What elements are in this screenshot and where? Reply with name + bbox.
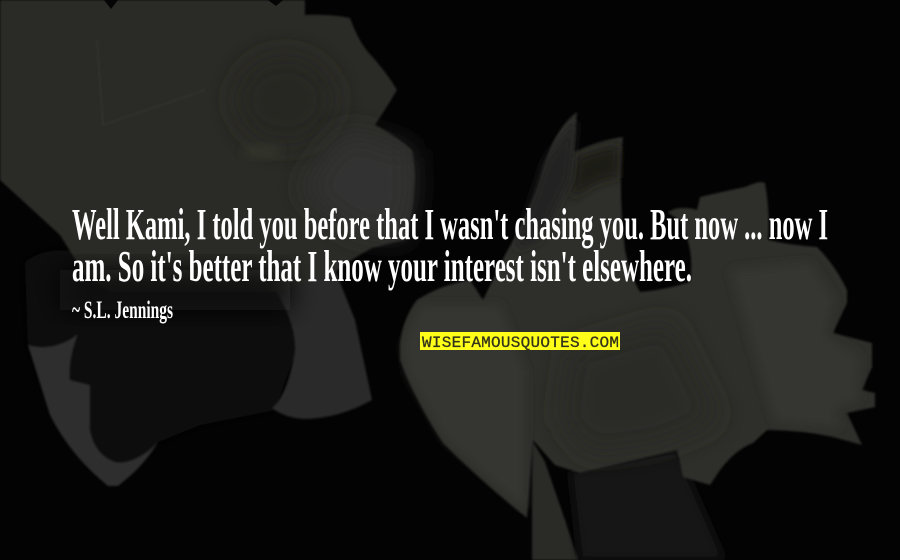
petal: lower-left highlight bbox=[28, 334, 158, 486]
petal: bottom fold bbox=[532, 440, 578, 560]
flower body silhouette bbox=[0, 0, 415, 292]
attribution: ~ S.L. Jennings bbox=[72, 297, 173, 324]
petal: lower-left shadow bbox=[25, 250, 300, 487]
right flower bbox=[400, 112, 875, 560]
highlight: trumpet rim bbox=[300, 130, 414, 240]
shade: bottom fade bbox=[60, 270, 290, 310]
shade: trumpet centre bbox=[235, 55, 335, 145]
notch marks at top edge bbox=[104, 0, 283, 9]
shade: back petal inner bbox=[572, 146, 620, 200]
watermark badge: WISEFAMOUSQUOTES.COM bbox=[422, 334, 619, 352]
crease lines bbox=[97, 40, 205, 125]
shadow: lower dark area bbox=[570, 450, 725, 560]
petal: lower-middle highlight bbox=[270, 270, 372, 419]
highlight: stamen tint bbox=[242, 145, 282, 159]
highlight: trumpet bbox=[730, 262, 860, 428]
shade: tall petal bbox=[515, 118, 577, 250]
quote text bbox=[72, 200, 828, 291]
flower body silhouette bbox=[400, 112, 875, 518]
highlight: body left bbox=[403, 305, 525, 510]
left flower bbox=[0, 0, 415, 487]
shade: body centre bbox=[560, 320, 720, 455]
